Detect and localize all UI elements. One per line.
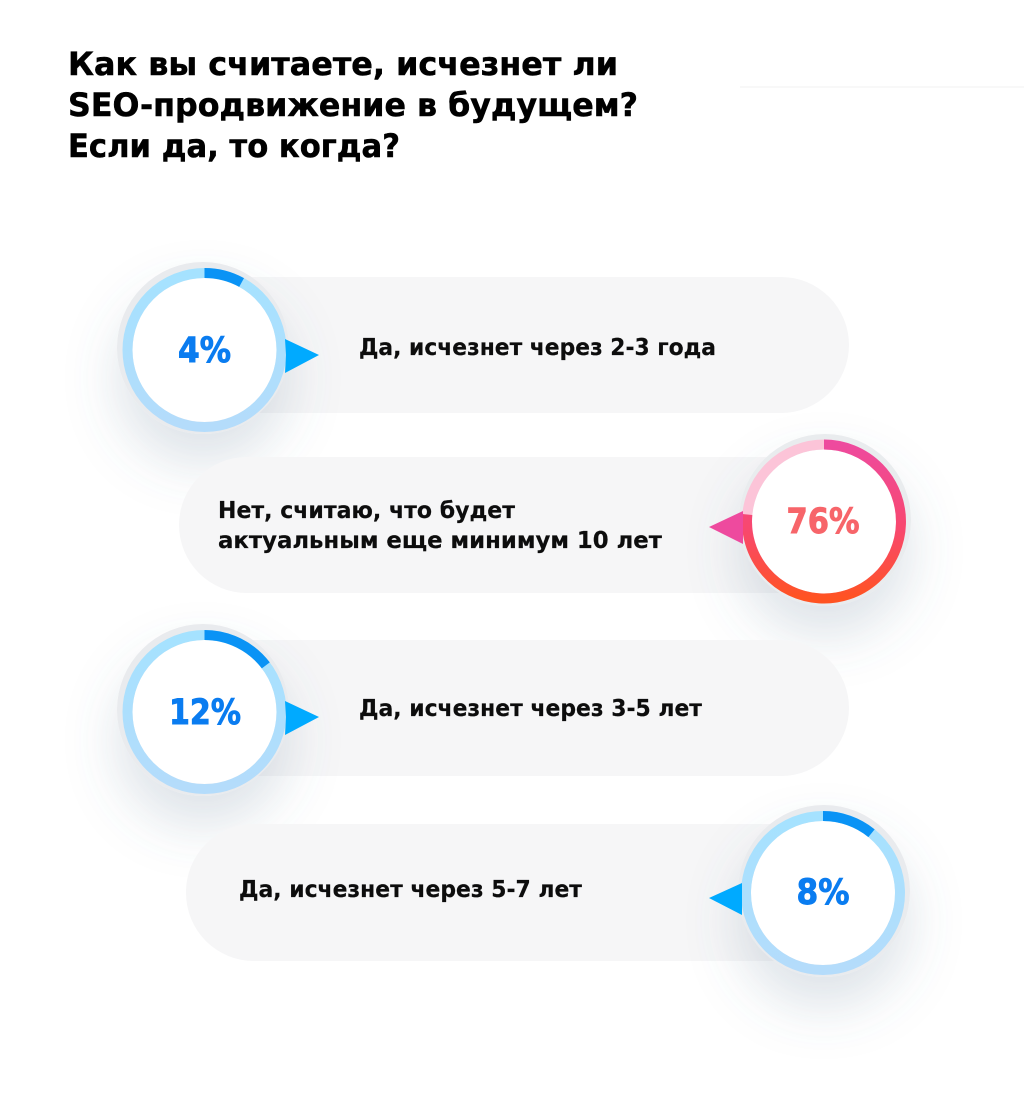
- value: 12%: [169, 693, 241, 733]
- title: SEO-продвижение в будущем?: [68, 86, 638, 124]
- value: 8%: [796, 873, 850, 913]
- label: Нет, считаю, что будет: [218, 496, 515, 524]
- icon: pointer arrow: [285, 339, 319, 373]
- title: [68, 45, 638, 165]
- title: Как вы считаете, исчезнет ли: [68, 45, 618, 83]
- row background pill: [179, 457, 868, 593]
- panel: 76% row: [179, 434, 911, 606]
- panel: 12% row: [117, 624, 849, 796]
- label: Да, исчезнет через 3-5 лет: [359, 694, 702, 722]
- donut chart: 4%: [117, 262, 289, 434]
- panel: 8% row: [186, 805, 910, 977]
- panel: 76% row: актуальным еще минимум 10 лет: [218, 526, 662, 554]
- icon: pointer arrow: [285, 701, 319, 735]
- title: Если да, то когда?: [68, 127, 400, 165]
- panel: 4% row: [117, 262, 849, 434]
- donut chart: 12%: [117, 624, 289, 796]
- label: Да, исчезнет через 5-7 лет: [239, 875, 582, 903]
- icon: pointer arrow: [709, 883, 742, 915]
- row background pill: [160, 277, 849, 413]
- row background pill: [186, 824, 868, 961]
- icon: pointer arrow: [709, 511, 743, 544]
- donut chart: 76%: [739, 434, 911, 606]
- donut chart: 8%: [738, 805, 910, 977]
- value: 4%: [178, 331, 231, 371]
- label: Да, исчезнет через 2-3 года: [359, 333, 716, 361]
- row background pill: [160, 640, 849, 776]
- value: 76%: [786, 502, 860, 542]
